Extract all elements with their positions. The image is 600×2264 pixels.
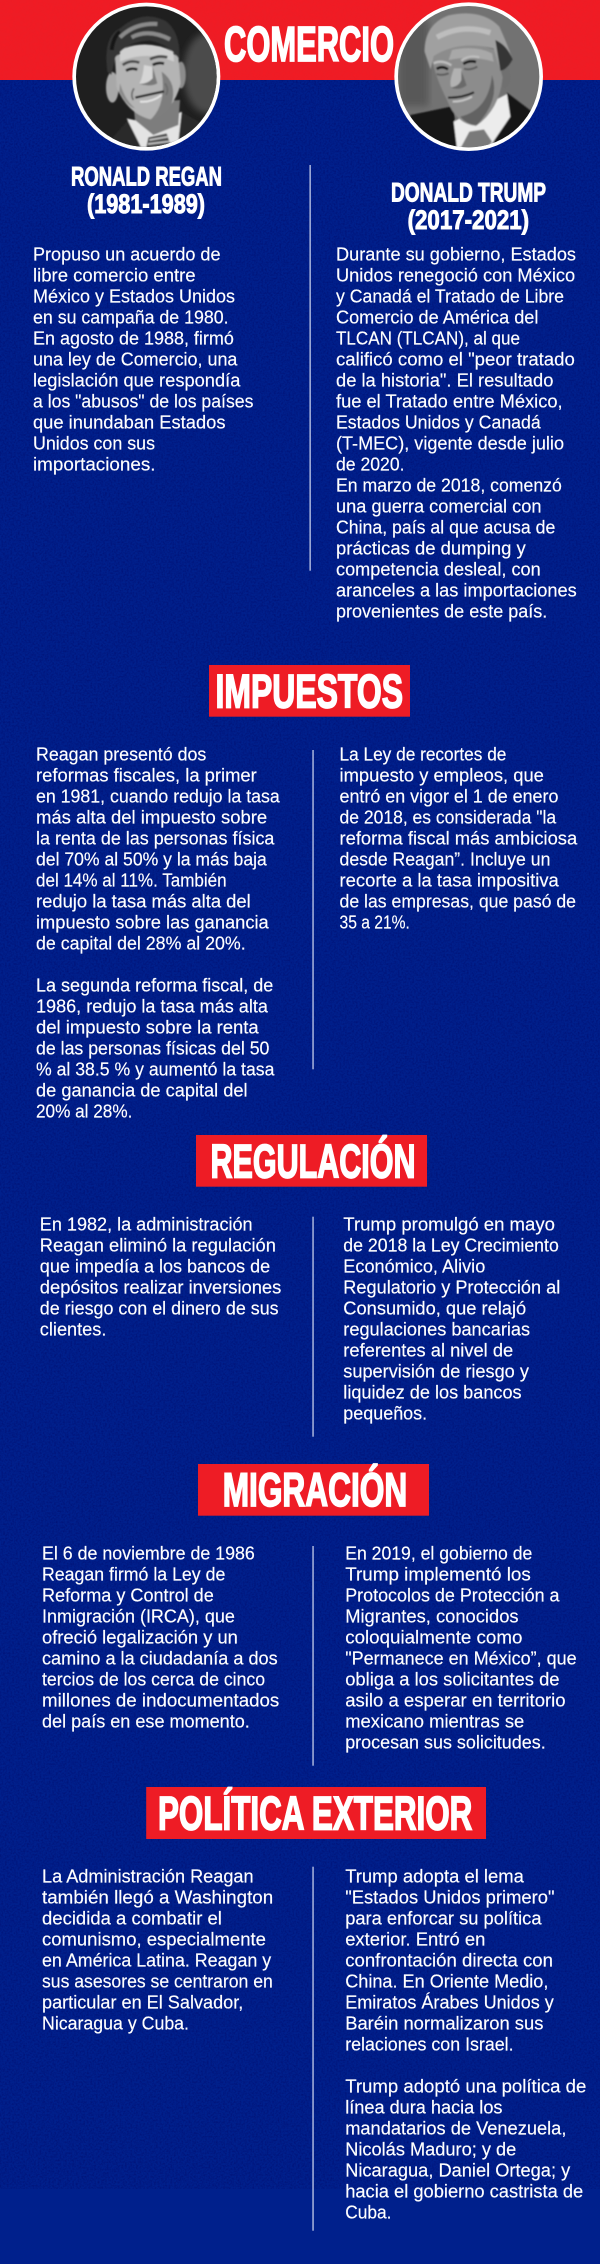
- text: Reagan impuestos: de las personas físicas del 50: [36, 1039, 269, 1059]
- text: Trump comercio: Unidos renegoció con México: [336, 266, 575, 286]
- text: Trump comercio: competencia desleal, con: [336, 560, 541, 580]
- divider: [309, 165, 311, 571]
- text: Reagan comercio: que inundaban Estados: [33, 413, 226, 433]
- text: Reagan impuestos: 1986, redujo la tasa más alta: [36, 997, 269, 1017]
- text: Trump política exterior: para enforcar su política: [345, 1909, 543, 1929]
- text: Trump migración: [345, 1543, 577, 1752]
- text: Trump regulación: Trump promulgó en mayo: [343, 1215, 555, 1235]
- text: Reagan política exterior: Nicaragua y Cuba.: [42, 2014, 189, 2034]
- text: Reagan regulación: depósitos realizar inversiones: [40, 1278, 281, 1298]
- text: Reagan impuestos: La segunda reforma fiscal, de: [36, 976, 273, 996]
- text: Trump política exterior: Nicaragua, Daniel Ortega; y: [345, 2161, 570, 2181]
- panel: impuestos: [36, 664, 578, 1122]
- text: Reagan impuestos: [36, 745, 281, 1122]
- text: Trump impuestos: [340, 745, 578, 933]
- text: Reagan regulación: clientes.: [40, 1320, 106, 1340]
- text: Trump política exterior: Baréin normalizaron sus: [345, 2014, 543, 2034]
- text: Trump comercio: Estados Unidos y Canadá: [336, 413, 542, 433]
- text: Trump impuestos: desde Reagan”. Incluye un: [340, 850, 550, 870]
- text: Trump política exterior: Nicolás Maduro; y de: [345, 2140, 516, 2160]
- text: Reagan migración: [42, 1543, 279, 1731]
- text: Reagan política exterior: comunismo, especialmente: [42, 1930, 266, 1950]
- text: Trump impuestos: recorte a la tasa impositiva: [340, 871, 560, 891]
- text: Trump migración: asilo a esperar en territorio: [345, 1690, 566, 1710]
- text: Trump comercio: En marzo de 2018, comenzó: [336, 476, 562, 496]
- text: Trump regulación: supervisión de riesgo y: [343, 1362, 529, 1382]
- text: Trump política exterior: línea dura hacia los: [345, 2098, 503, 2118]
- text: Reagan impuestos: impuesto sobre las ganancia: [36, 913, 270, 933]
- text: Reagan migración: El 6 de noviembre de 1986: [42, 1543, 255, 1563]
- text: Trump política exterior: Cuba.: [345, 2203, 392, 2223]
- text: Reagan migración: millones de indocumentados: [42, 1690, 279, 1710]
- text: Trump impuestos: reforma fiscal más ambiciosa: [340, 829, 578, 849]
- text: Trump regulación: [343, 1215, 560, 1424]
- text: Trump comercio: de la historia". El resultado: [336, 371, 553, 391]
- text: Trump regulación: regulaciones bancarias: [343, 1320, 530, 1340]
- text: Reagan comercio: importaciones.: [33, 455, 156, 475]
- text: Reagan política exterior: La Administración Reagan: [42, 1867, 254, 1887]
- text: Reagan comercio: Unidos con sus: [33, 434, 155, 454]
- text: Reagan migración: camino a la ciudadanía a dos: [42, 1648, 278, 1668]
- name: Donald Trump: (2017-2021): [408, 205, 529, 235]
- text: Trump comercio: Durante su gobierno, Estados: [336, 245, 576, 265]
- text: Reagan migración: ofreció legalización y un: [42, 1627, 238, 1647]
- text: Reagan política exterior: particular en El Salvador,: [42, 1993, 243, 2013]
- text: Trump migración: Migrantes, conocidos: [345, 1606, 519, 1626]
- heading: impuestos: [209, 664, 410, 717]
- title: comercio: COMERCIO: [224, 17, 394, 72]
- text: Trump comercio: provenientes de este país.: [336, 602, 547, 622]
- text: Reagan impuestos: del impuesto sobre la renta: [36, 1018, 260, 1038]
- divider: [312, 750, 314, 1069]
- text: Reagan impuestos: más alta del impuesto sobre: [36, 808, 267, 828]
- text: Reagan comercio: En agosto de 1988, firmó: [33, 329, 234, 349]
- text: Reagan impuestos: redujo la tasa más alta del: [36, 892, 251, 912]
- text: Trump comercio: una guerra comercial con: [336, 497, 542, 517]
- text: Trump comercio: (T-MEC), vigente desde julio: [336, 434, 564, 454]
- text: Trump comercio: China, país al que acusa de: [336, 518, 555, 538]
- text: Trump política exterior: relaciones con Israel.: [345, 2035, 514, 2055]
- text: Trump política exterior: confrontación directa con: [345, 1951, 553, 1971]
- text: Reagan impuestos: reformas fiscales, la primer: [36, 766, 257, 786]
- text: Reagan política exterior: decidida a combatir el: [42, 1909, 222, 1929]
- text: Trump política exterior: Trump adopta el lema: [345, 1867, 525, 1887]
- text: Reagan migración: Inmigración (IRCA), que: [42, 1606, 235, 1626]
- text: Trump regulación: Consumido, que relajó: [343, 1299, 526, 1319]
- text: Trump migración: Trump implementó los: [345, 1564, 531, 1584]
- panel: regulación: [40, 1134, 560, 1437]
- text: Trump comercio: [336, 245, 577, 622]
- text: Reagan política exterior: en América Latina. Reagan y: [42, 1951, 271, 1971]
- text: Trump impuestos: impuesto y empleos, que: [340, 766, 544, 786]
- text: Reagan impuestos: Reagan presentó dos: [36, 745, 206, 765]
- text: Trump comercio: Comercio de América del: [336, 308, 538, 328]
- header: red band: [0, 0, 600, 80]
- text: Reagan impuestos: de ganancia de capital del: [36, 1081, 248, 1101]
- text: Trump política exterior: China. En Oriente Medio,: [345, 1972, 548, 1992]
- text: Reagan impuestos: en 1981, cuando redujo la tasa: [36, 787, 281, 807]
- text: Reagan impuestos: de capital del 28% al 20%.: [36, 934, 246, 954]
- text: Reagan regulación: de riesgo con el dinero de sus: [40, 1299, 279, 1319]
- divider: [312, 1867, 314, 2231]
- text: Reagan impuestos: % al 38.5 % y aumentó la tasa: [36, 1060, 275, 1080]
- text: Trump política exterior: exterior. Entró en: [345, 1930, 485, 1950]
- text: Trump regulación: pequeños.: [343, 1404, 427, 1424]
- text: Trump migración: coloquialmente como: [345, 1627, 522, 1647]
- text: Reagan migración: Reagan firmó la Ley de: [42, 1564, 225, 1584]
- text: Trump migración: procesan sus solicitudes.: [345, 1732, 546, 1752]
- divider: [312, 1217, 314, 1437]
- text: Reagan comercio: en su campaña de 1980.: [33, 308, 229, 328]
- panel: migración: [42, 1463, 577, 1766]
- text: Trump migración: Protocolos de Protección a: [345, 1585, 560, 1605]
- name: Donald Trump: [391, 177, 546, 235]
- name: Ronald Reagan: (1981-1989): [87, 189, 205, 219]
- text: Trump impuestos: La Ley de recortes de: [340, 745, 506, 765]
- text: Trump política exterior: "Estados Unidos primero": [345, 1888, 555, 1908]
- portrait: Donald Trump: [392, 0, 547, 155]
- text: Reagan política exterior: [42, 1867, 273, 2034]
- name: Ronald Reagan: RONALD REGAN: [71, 161, 222, 191]
- text: Trump política exterior: Trump adoptó una política de: [345, 2077, 586, 2097]
- text: Trump política exterior: [345, 1867, 586, 2223]
- text: Trump comercio: aranceles a las importaciones: [336, 581, 577, 601]
- text: Trump migración: "Permanece en México”, que: [345, 1648, 577, 1668]
- text: Trump política exterior: hacia el gobierno castrista de: [345, 2182, 583, 2202]
- text: Trump política exterior: mandatarios de Venezuela,: [345, 2119, 566, 2139]
- heading: migración: MIGRACIÓN: [223, 1463, 407, 1516]
- text: Trump comercio: fue el Tratado entre México,: [336, 392, 563, 412]
- text: Reagan comercio: México y Estados Unidos: [33, 287, 235, 307]
- text: Trump comercio: TLCAN (TLCAN), al que: [336, 329, 520, 349]
- text: Trump comercio: y Canadá el Tratado de Libre: [336, 287, 564, 307]
- text: Trump regulación: Económico, Alivio: [343, 1257, 485, 1277]
- text: Trump regulación: liquidez de los bancos: [343, 1383, 522, 1403]
- heading: impuestos: IMPUESTOS: [216, 664, 403, 717]
- text: Trump regulación: de 2018 la Ley Crecimiento: [343, 1236, 559, 1256]
- text: Reagan comercio: [33, 245, 253, 475]
- text: Reagan comercio: una ley de Comercio, una: [33, 350, 238, 370]
- text: Trump comercio: de 2020.: [336, 455, 404, 475]
- portrait: Ronald Reagan: [72, 2, 220, 151]
- heading: migración: [198, 1463, 429, 1516]
- text: Reagan comercio: libre comercio entre: [33, 266, 196, 286]
- text: Trump política exterior: Emiratos Árabes Unidos y: [345, 1993, 554, 2013]
- text: Reagan regulación: [40, 1215, 281, 1340]
- heading: regulación: REGULACIÓN: [210, 1134, 416, 1187]
- text: Reagan impuestos: 20% al 28%.: [36, 1102, 132, 1122]
- text: Trump impuestos: de 2018, es considerada "la: [340, 808, 557, 828]
- text: Reagan comercio: a los "abusos" de los países: [33, 392, 253, 412]
- text: Reagan impuestos: del 70% al 50% y la más baja: [36, 850, 268, 870]
- text: Reagan política exterior: sus asesores se centraron en: [42, 1972, 273, 1992]
- text: Reagan migración: tercios de los cerca de cinco: [42, 1669, 265, 1689]
- text: Trump migración: obliga a los solicitantes de: [345, 1669, 560, 1689]
- panel: política exterior: [42, 1786, 586, 2231]
- text: Reagan regulación: Reagan eliminó la regulación: [40, 1236, 276, 1256]
- text: Reagan migración: Reforma y Control de: [42, 1585, 214, 1605]
- text: Reagan comercio: Propuso un acuerdo de: [33, 245, 220, 265]
- text: Reagan impuestos: del 14% al 11%. También: [36, 871, 227, 891]
- text: Reagan comercio: legislación que respondía: [33, 371, 241, 391]
- text: Trump impuestos: entró en vigor el 1 de enero: [340, 787, 558, 807]
- text: Trump comercio: calificó como el "peor tratado: [336, 350, 575, 370]
- text: Trump impuestos: de las empresas, que pasó de: [340, 892, 576, 912]
- text: Trump regulación: Regulatorio y Protección al: [343, 1278, 560, 1298]
- divider: [312, 1546, 314, 1766]
- text: Trump migración: En 2019, el gobierno de: [345, 1543, 532, 1563]
- text: Reagan regulación: que impedía a los bancos de: [40, 1257, 270, 1277]
- name: Ronald Reagan: [71, 161, 222, 219]
- text: Reagan regulación: En 1982, la administración: [40, 1215, 253, 1235]
- text: Reagan política exterior: también llegó a Washington: [42, 1888, 273, 1908]
- text: Trump regulación: referentes al nivel de: [343, 1341, 513, 1361]
- text: Trump comercio: prácticas de dumping y: [336, 539, 526, 559]
- heading: regulación: [196, 1134, 427, 1187]
- text: Reagan impuestos: la renta de las personas física: [36, 829, 275, 849]
- text: Trump impuestos: 35 a 21%.: [340, 913, 410, 933]
- text: Reagan migración: del país en ese momento.: [42, 1711, 250, 1731]
- text: Trump migración: mexicano mientras se: [345, 1711, 524, 1731]
